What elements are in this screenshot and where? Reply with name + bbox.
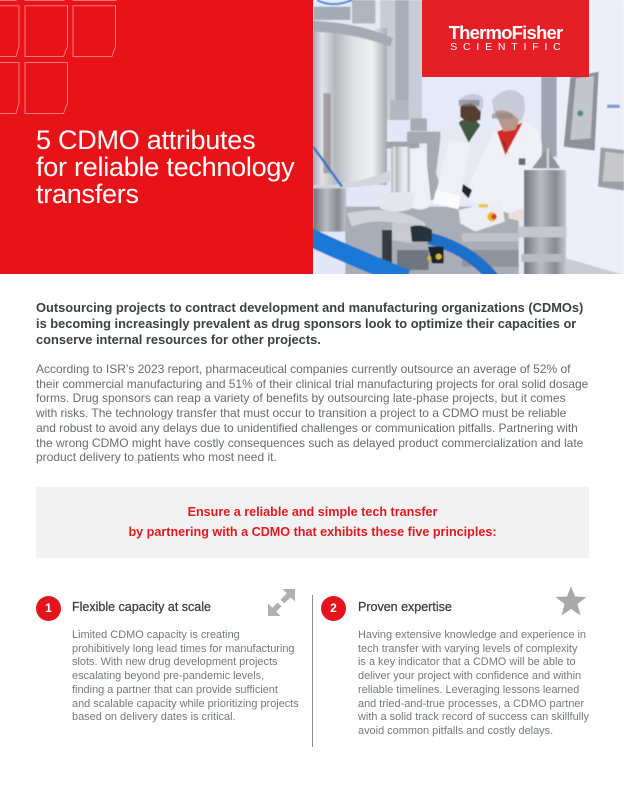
body text 1: finding a partner that can provide sufficient: [72, 684, 278, 696]
intro statement: conserve internal resources for other projects.: [36, 332, 321, 347]
panel: attribute 1: [36, 589, 299, 723]
wall panels: [564, 72, 599, 151]
lower equipment: [313, 188, 346, 232]
scientist front: [469, 122, 542, 213]
body paragraph: and robust to avoid any delays due to unidentified challenges or communication pitfalls. Partnering with: [36, 421, 578, 435]
photo: scientists with manufacturing equipment: [313, 0, 624, 274]
title: 5 CDMO attributes: [36, 125, 255, 155]
intro statement: [36, 300, 583, 347]
title: transfers: [36, 179, 139, 209]
body paragraph: with risks. The technology transfer that must occur to transition a project to a CDMO must be reliable: [36, 406, 566, 420]
body text 2: [358, 629, 589, 737]
body paragraph: the wrong CDMO might have costly consequences such as delayed product commercialization and late: [36, 436, 583, 450]
callout: Ensure a reliable and simple tech transfer: [188, 505, 437, 519]
number badge 1: [36, 596, 61, 621]
decorative tile outlines: [0, 0, 116, 114]
intro statement: is becoming increasingly prevalent as drug sponsors look to optimize their capacities or: [36, 316, 576, 331]
scientist back: [436, 122, 492, 200]
logo wordmark: [448, 22, 567, 53]
yellow-button control box: [459, 200, 505, 232]
body text 1: Limited CDMO capacity is creating: [72, 629, 240, 641]
body text 2: tech transfer with varying levels of complexity: [358, 643, 577, 655]
body paragraph: According to ISR’s 2023 report, pharmaceutical companies currently outsource an average of 52% of: [36, 362, 570, 376]
body paragraph: [36, 362, 588, 464]
number badge 1: 1: [45, 601, 52, 615]
heading 2: Proven expertise: [358, 600, 452, 614]
panel: red title header: [0, 0, 314, 274]
body text 1: slots. With new drug development projects: [72, 656, 277, 668]
logo block: [422, 0, 589, 77]
heading 1: Flexible capacity at scale: [72, 600, 211, 614]
divider: [312, 595, 313, 747]
body paragraph: product delivery to patients who most need it.: [36, 450, 277, 464]
body paragraph: their commercial manufacturing and 51% of their clinical trial manufacturing projects for oral solid dosage: [36, 377, 588, 391]
panel: attribute 2: [321, 586, 589, 737]
callout: [36, 487, 589, 558]
right pillar: [532, 148, 560, 168]
body text 2: and tried-and-true processes, a CDMO partner: [358, 698, 584, 710]
body text 1: [72, 629, 299, 723]
title: [36, 125, 294, 209]
main vessel: [313, 28, 387, 185]
filter cartridges: [434, 140, 470, 208]
logo wordmark: SCIENTIFIC: [450, 41, 567, 53]
number badge 2: 2: [330, 601, 337, 615]
body text 2: Having extensive knowledge and experience in: [358, 629, 586, 641]
body paragraph: forms. Drug sponsors can reap a variety of benefits by outsourcing late-phase projects, but it comes: [36, 391, 566, 405]
body text 1: and scalable capacity while prioritizing projects: [72, 698, 299, 710]
body text 2: deliver your project with confidence and within: [358, 670, 581, 682]
body text 2: avoid common pitfalls and costly delays.: [358, 725, 553, 737]
body text 1: prohibitively long lead times for manufacturing: [72, 643, 295, 655]
body text 1: escalating beyond pre-pandemic levels,: [72, 670, 264, 682]
body text 1: based on delivery dates is critical.: [72, 711, 236, 723]
callout: by partnering with a CDMO that exhibits these five principles:: [128, 524, 497, 538]
blue hoses: [309, 237, 407, 278]
icon: star: [556, 586, 586, 616]
number badge 2: [321, 596, 346, 621]
body text 2: is a key indicator that a CDMO will be able to: [358, 656, 576, 668]
body text 2: with a solid track record of success can skillfully: [358, 711, 589, 723]
icon: expand arrows: [268, 589, 295, 616]
logo wordmark: ThermoFisher: [449, 22, 562, 43]
intro statement: Outsourcing projects to contract development and manufacturing organizations (CDMOs): [36, 300, 583, 315]
title: for reliable technology: [36, 152, 294, 182]
body text 2: reliable timelines. Leveraging lessons learned: [358, 684, 579, 696]
